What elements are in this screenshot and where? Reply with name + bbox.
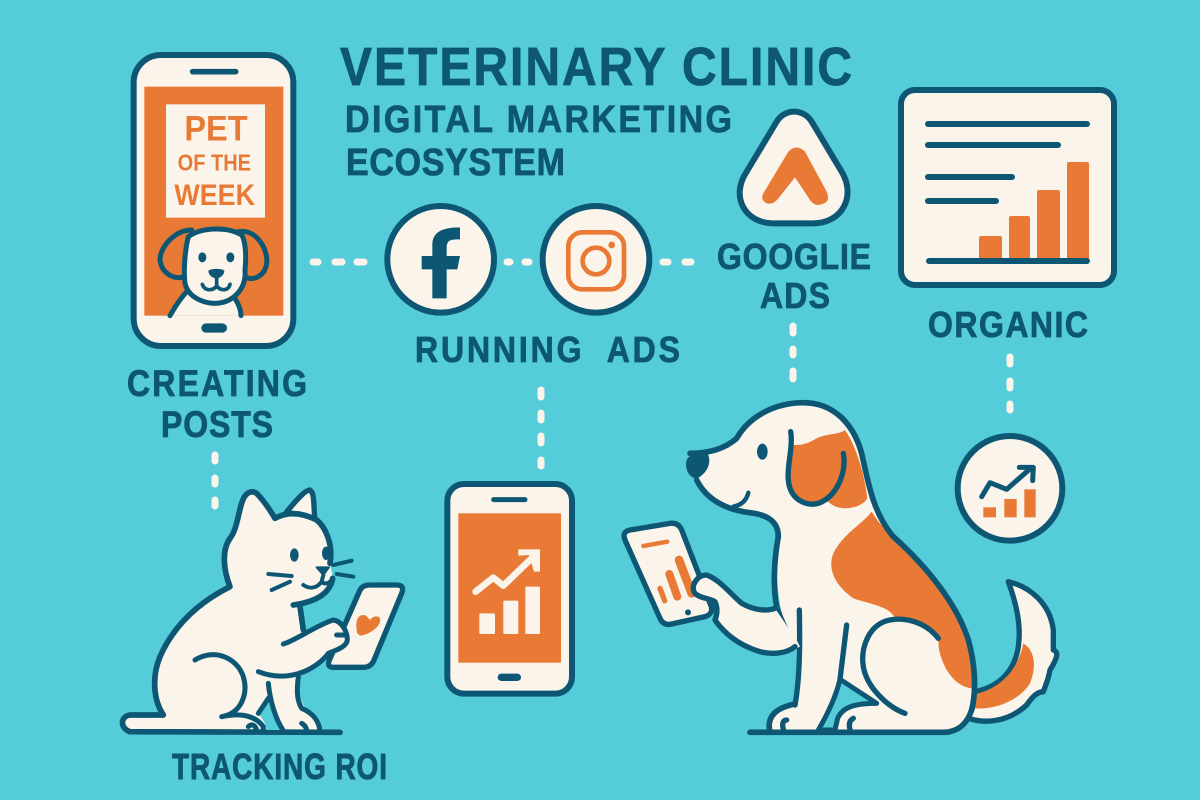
icon: phone with pet of the week post [134,55,293,346]
illustration: dog holding phone [624,403,1057,732]
label: creating posts [127,364,307,446]
phone in dog paw [624,523,712,624]
label: google ads: ADS [760,276,830,316]
cat body [123,492,333,732]
cat arm [258,620,347,676]
connector: dashed links [215,262,1010,506]
body outline [690,403,975,732]
title: VETERINARY CLINIC [340,36,852,97]
legs [783,610,938,730]
label: creating posts: CREATING [127,364,307,405]
label: google ads [717,237,871,316]
icon: phone with pet of the week post: WEEK [174,179,255,212]
title: DIGITAL MARKETING [345,97,732,140]
icon: instagram [543,206,649,313]
panel: organic report chart [901,90,1114,285]
title [340,36,852,183]
icon: google ads triangle [740,112,848,223]
illustration: analytics phone [447,484,572,694]
back patch [831,512,973,688]
label: organic: ORGANIC [928,305,1088,345]
label: google ads: GOOGLIE [717,237,871,277]
dog body [688,403,975,732]
right ear [287,490,315,520]
cat phone [329,585,403,667]
label: running ads: RUNNING ADS [415,330,680,371]
title: ECOSYSTEM [346,140,565,183]
arm [693,575,800,653]
icon: phone with pet of the week post: OF THE [178,150,251,176]
icon: small growth chart circle [958,436,1062,541]
illustration: cat holding phone [122,490,403,732]
ear [788,432,844,504]
eye and nose [686,444,768,507]
tail [968,582,1057,721]
legs [195,655,320,732]
face [268,547,353,590]
label: tracking roi: TRACKING ROI [172,746,387,787]
label: creating posts: POSTS [161,405,273,446]
icon: phone with pet of the week post: PET [184,110,248,149]
head patch [788,430,867,508]
cat outline [122,492,340,732]
icon: facebook [387,206,494,313]
